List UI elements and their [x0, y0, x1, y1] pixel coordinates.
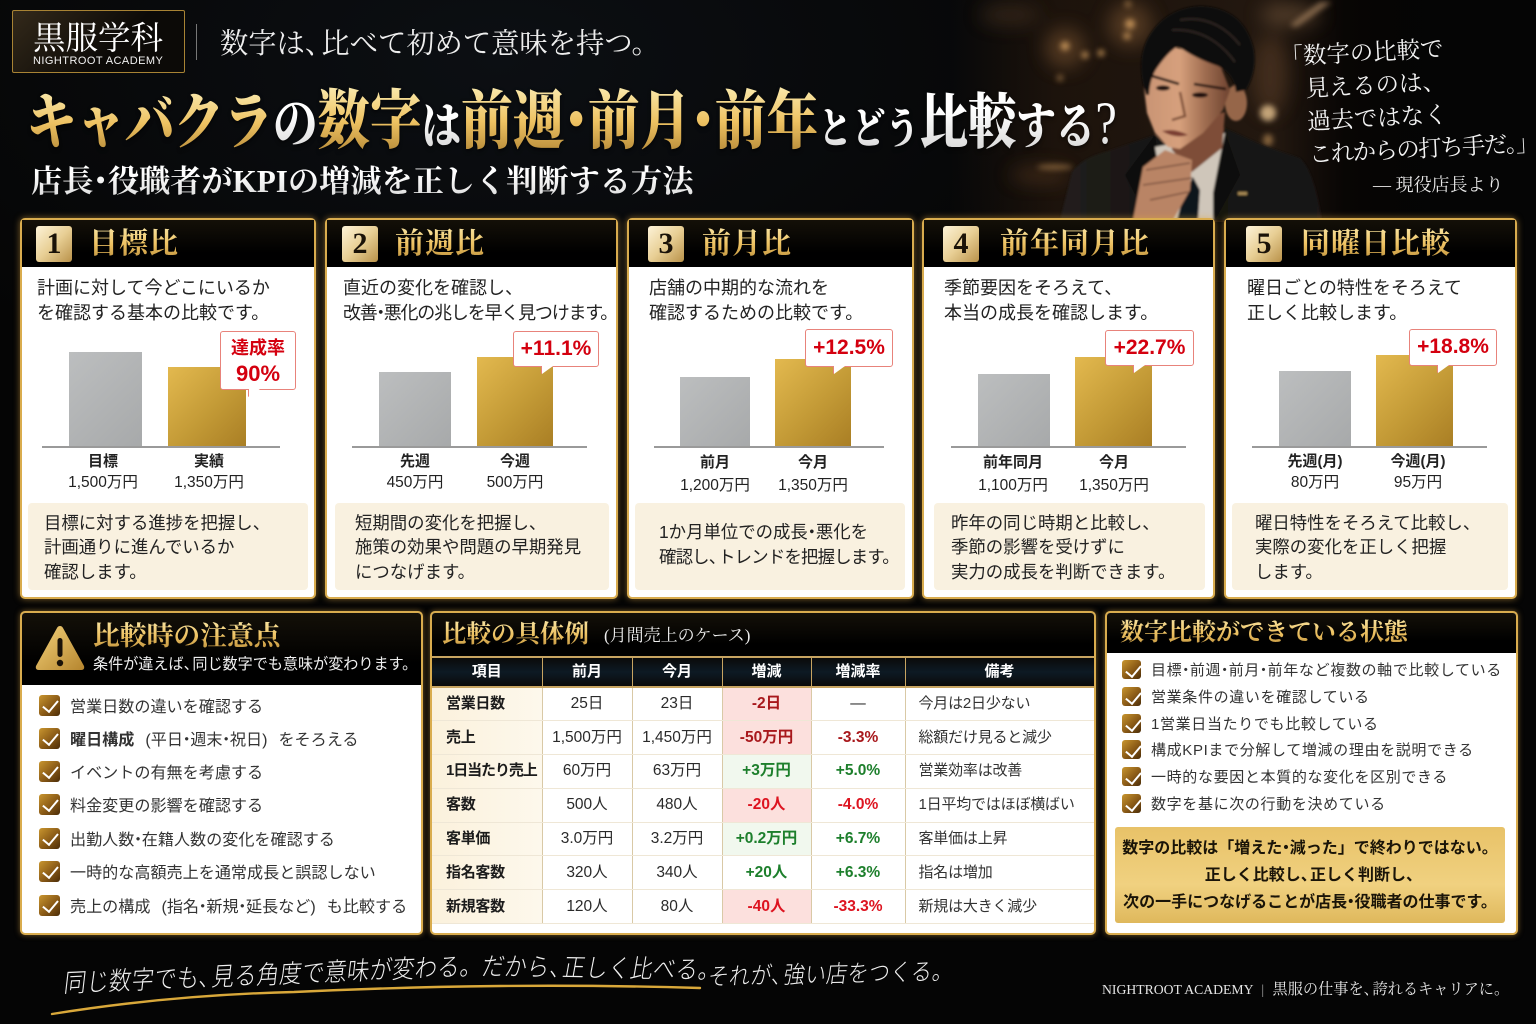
comparison table: — [850, 695, 866, 712]
label: this week: 500万円 [487, 474, 543, 491]
comparison table: -2日 [752, 695, 781, 712]
card heading: 目標比 [89, 228, 179, 260]
label: target: 1,500万円 [68, 474, 138, 491]
footer slogan: 同じ数字でも、見る角度で意味が変わる。 [62, 952, 484, 998]
comparison table: 340人 [656, 864, 698, 881]
note text [355, 512, 581, 582]
comparison table: +6.3% [836, 864, 880, 881]
comparison table: 指名は増加 [918, 864, 993, 881]
note text: 確認し、トレンドを把握します。 [659, 546, 899, 566]
check item: 営業日数の違いを確認する [70, 698, 263, 716]
note text: します。 [1255, 562, 1323, 582]
comparison table: 今月 [662, 663, 692, 680]
bar: last year [978, 374, 1050, 447]
label: this week: 今週(月) [1390, 453, 1446, 470]
comparison table: 項目 [472, 663, 502, 680]
callout [220, 331, 296, 390]
card heading: 前月比 [702, 228, 792, 260]
label: this week [487, 453, 543, 491]
quote: 「数字の比較で [1279, 36, 1444, 71]
card header [1226, 220, 1515, 267]
label: actual: 1,350万円 [174, 474, 244, 491]
label: target: 目標 [88, 453, 118, 470]
label: this month: 今月 [798, 454, 828, 471]
label: last month: 1,200万円 [680, 477, 750, 494]
bar: this month [1075, 357, 1152, 447]
card 1: target comparison [20, 218, 316, 599]
check item: 営業条件の違いを確認している [1151, 689, 1370, 706]
comparison table: 客数 [446, 796, 475, 813]
note text: 曜日特性をそろえて比較し、 [1255, 512, 1480, 532]
comparison table: 今月は2日少ない [918, 695, 1030, 712]
panel subheading: (月間売上のケース) [604, 626, 750, 645]
logo subtitle: NIGHTROOT ACADEMY [33, 55, 163, 67]
number badge: 2 [352, 227, 368, 260]
description: 正しく比較します。 [1247, 303, 1407, 323]
comparison table: +6.7% [836, 830, 880, 847]
panel header [432, 613, 1094, 658]
description: を確認する基本の比較です。 [37, 303, 269, 323]
label: this week [1390, 453, 1446, 491]
note text: 昨年の同じ時期と比較し、 [951, 512, 1160, 532]
bar: target [69, 352, 142, 447]
hand [1133, 150, 1192, 220]
card heading: 前年同月比 [1000, 228, 1150, 260]
comparison table: 総額だけ見ると減少 [918, 729, 1052, 746]
comparison table: 1日当たり売上 [446, 762, 537, 779]
comparison table: -4.0% [838, 796, 878, 813]
label: target [68, 453, 138, 491]
check item: 出勤人数・在籍人数の変化を確認する [70, 831, 335, 849]
note text: 施策の効果や問題の早期発見 [355, 537, 581, 557]
description: 店舗の中期的な流れを [649, 278, 829, 298]
comparison table: -20人 [748, 796, 785, 813]
number badge [943, 226, 979, 262]
main title: キャバクラの数字は前週・前月・前年とどう比較する? [27, 86, 1117, 157]
comparison table: 営業効率は改善 [918, 762, 1022, 779]
note box [335, 503, 609, 590]
callout [805, 329, 893, 367]
label: last week: 先週(月) [1288, 453, 1342, 470]
comparison table: 指名客数 [446, 864, 505, 881]
comparison table: +5.0% [836, 762, 880, 779]
comparison table: 60万円 [563, 762, 611, 779]
description [37, 278, 270, 323]
comparison table: 63万円 [653, 762, 701, 779]
logo box [12, 10, 185, 73]
number badge [648, 226, 684, 262]
comparison table: +20人 [746, 864, 787, 881]
callout: 達成率 [231, 338, 285, 358]
callout: 90% [236, 361, 280, 386]
comparison table: 480人 [656, 796, 698, 813]
comparison table: 1,450万円 [642, 729, 712, 746]
check item: 1営業日当たりでも比較している [1151, 716, 1379, 732]
comparison table: 3.2万円 [651, 830, 703, 847]
panel heading: 比較の具体例 [442, 621, 589, 648]
note box [1232, 503, 1508, 590]
suit [1060, 127, 1322, 220]
description: 曜日ごとの特性をそろえて [1247, 278, 1462, 298]
label: last month: 前月 [700, 454, 730, 471]
number badge [1246, 226, 1282, 262]
gold summary box: 次の一手につなげることが店長・役職者の仕事です。 [1123, 894, 1497, 911]
label: this month: 1,350万円 [778, 477, 848, 494]
callout: +18.8% [1417, 335, 1489, 358]
label: last month [680, 454, 750, 494]
note box [635, 503, 905, 590]
description: 改善・悪化の兆しを早く見つけます。 [343, 303, 617, 323]
bar: this week [1376, 355, 1453, 447]
bar: last week [379, 372, 451, 447]
callout [1105, 330, 1194, 366]
label: last week: 先週 [400, 453, 430, 470]
comparison table: -40人 [748, 898, 785, 915]
note text: 目標に対する進捗を把握し、 [44, 512, 270, 532]
panel subheading: 条件が違えば、同じ数字でも意味が変わります。 [93, 656, 417, 673]
number badge: 1 [46, 227, 62, 260]
label: last year: 前年同月 [983, 454, 1043, 471]
logo name: 黒服学科 [33, 21, 163, 57]
quote: これからの打ち手だ。」 [1308, 131, 1536, 169]
number badge: 5 [1256, 227, 1272, 260]
label: this month: 1,350万円 [1079, 477, 1149, 494]
comparison table: 23日 [661, 695, 693, 712]
footer brand line: NIGHTROOT ACADEMY | 黒服の仕事を、誇れるキャリアに。 [1102, 981, 1509, 998]
number badge [342, 226, 378, 262]
comparison table: 増減 [751, 663, 782, 680]
bar: actual [168, 367, 246, 447]
description [343, 278, 617, 323]
label: last week: 450万円 [387, 474, 443, 491]
label: actual: 実績 [194, 453, 224, 470]
description: 計画に対して今どこにいるか [37, 278, 270, 298]
label: this week: 今週 [500, 453, 530, 470]
description: 本当の成長を確認します。 [944, 303, 1158, 323]
number badge: 3 [658, 227, 674, 260]
gold summary box: 正しく比較し、正しく判断し、 [1205, 867, 1422, 884]
label: actual [174, 453, 244, 491]
comparison table: -33.3% [833, 898, 883, 915]
comparison table: 備考 [984, 663, 1014, 680]
comparison table: 新規は大きく減少 [918, 898, 1037, 915]
panel: cautions [20, 611, 423, 935]
check item: 売上の構成 (指名・新規・延長など) も比較する [70, 898, 407, 916]
panel header [1107, 613, 1516, 653]
note text: 実力の成長を判断できます。 [951, 562, 1175, 582]
label: this month: 今月 [1099, 454, 1129, 471]
comparison table: 80人 [661, 898, 693, 915]
comparison table: +3万円 [742, 762, 791, 779]
description: 季節要因をそろえて、 [944, 278, 1122, 298]
card header [327, 220, 616, 267]
comparison table: 25日 [571, 695, 603, 712]
warning icon [36, 626, 84, 670]
quote: 見えるのは、 [1305, 69, 1446, 103]
comparison table: 増減率 [835, 663, 880, 680]
label: last week [387, 453, 443, 491]
panel header [22, 613, 421, 685]
label: this month [778, 454, 848, 494]
note text: 季節の影響を受けずに [951, 537, 1125, 557]
note box [934, 503, 1205, 590]
quote [1279, 36, 1536, 169]
label: last week: 80万円 [1291, 474, 1339, 491]
panel: worked example table [430, 611, 1096, 935]
comparison table: 新規客数 [446, 898, 505, 915]
card 5: same weekday [1224, 218, 1517, 599]
label: this week: 95万円 [1394, 474, 1442, 491]
check item: 目標・前週・前月・前年など複数の軸で比較している [1151, 662, 1502, 679]
note text: 確認します。 [44, 562, 147, 582]
description [1247, 278, 1462, 323]
comparison table: 1日平均ではほぼ横ばい [918, 796, 1075, 813]
description [649, 278, 863, 323]
comparison table: 3.0万円 [561, 830, 613, 847]
callout [513, 331, 599, 367]
comparison table: +0.2万円 [736, 830, 797, 847]
comparison table: 320人 [566, 864, 608, 881]
label: last year [978, 454, 1048, 494]
check item: イベントの有無を考慮する [70, 764, 263, 782]
card 4: year over year [922, 218, 1215, 599]
comparison table: 1,500万円 [552, 729, 622, 746]
card 2: week over week [325, 218, 618, 599]
note text [659, 522, 899, 566]
comparison table: -50万円 [740, 729, 793, 746]
footer slogan: だから、正しく比べる。 [480, 953, 723, 985]
hair [1141, 6, 1255, 95]
panel heading: 比較時の注意点 [93, 621, 281, 651]
comparison table: 客単価は上昇 [918, 830, 1007, 847]
portrait photo: manager in dark bar [974, 0, 1335, 222]
note box [28, 503, 308, 590]
panel: good state checklist [1105, 611, 1518, 935]
comparison table: 売上 [446, 729, 475, 746]
check item: 一時的な要因と本質的な変化を区別できる [1151, 769, 1448, 786]
note text: 計画通りに進んでいるか [44, 537, 234, 557]
gold summary box [1115, 827, 1505, 923]
description: 直近の変化を確認し、 [343, 278, 523, 298]
check item: 曜日構成 (平日・週末・祝日) をそろえる [70, 731, 358, 749]
card header [22, 220, 314, 267]
description: 確認するための比較です。 [649, 303, 863, 323]
tagline: 数字は、比べて初めて意味を持つ。 [220, 29, 660, 60]
comparison table: 営業日数 [446, 695, 505, 712]
card header [629, 220, 912, 267]
note text [1255, 512, 1480, 582]
card 3: month over month [627, 218, 914, 599]
check item: 数字を基に次の行動を決めている [1151, 796, 1386, 813]
callout: +11.1% [521, 337, 591, 360]
note text: 短期間の変化を把握し、 [355, 512, 546, 532]
callout: +12.5% [813, 336, 885, 359]
check item: 料金変更の影響を確認する [70, 797, 263, 815]
subtitle: 店長・役職者がKPIの増減を正しく判断する方法 [31, 164, 693, 199]
number badge [36, 226, 72, 262]
comparison table: -3.3% [838, 729, 878, 746]
note text: 実際の変化を正しく把握 [1255, 537, 1446, 557]
check item: 構成KPIまで分解して増減の理由を説明できる [1151, 742, 1474, 759]
footer slogan: それが、強い店をつくる。 [706, 958, 955, 991]
note text [951, 512, 1175, 582]
bar: this month [775, 359, 851, 447]
footer underline stroke [40, 975, 720, 1020]
comparison table [432, 656, 1094, 924]
callout [1409, 329, 1497, 366]
bar: this week [477, 357, 553, 447]
callout: +22.7% [1114, 336, 1185, 359]
comparison table: 500人 [566, 796, 608, 813]
comparison table: 客単価 [446, 830, 490, 847]
facial features [1152, 76, 1226, 89]
bar: last week [1279, 371, 1351, 447]
note text: 1か月単位での成長・悪化を [659, 522, 868, 542]
check item: 一時的な高額売上を通常成長と誤認しない [70, 864, 376, 882]
label: last week [1288, 453, 1342, 491]
comparison table: 前月 [572, 663, 602, 680]
note text: につなげます。 [355, 562, 475, 582]
card heading: 前週比 [395, 228, 485, 260]
card header [924, 220, 1213, 267]
footer slogan [62, 952, 955, 998]
gold summary box: 数字の比較は「増えた・減った」で終わりではない。 [1122, 840, 1498, 857]
label: last year: 1,100万円 [978, 477, 1048, 494]
number badge: 4 [954, 227, 968, 260]
quote: 過去ではなく [1307, 102, 1448, 136]
description [944, 278, 1158, 323]
note text [44, 512, 270, 582]
card heading: 同曜日比較 [1301, 228, 1451, 260]
comparison table: 120人 [566, 898, 608, 915]
label: this month [1079, 454, 1149, 494]
panel heading: 数字比較ができている状態 [1120, 620, 1408, 646]
bar: last month [680, 377, 750, 447]
quote attribution: ― 現役店長より [1373, 175, 1504, 195]
